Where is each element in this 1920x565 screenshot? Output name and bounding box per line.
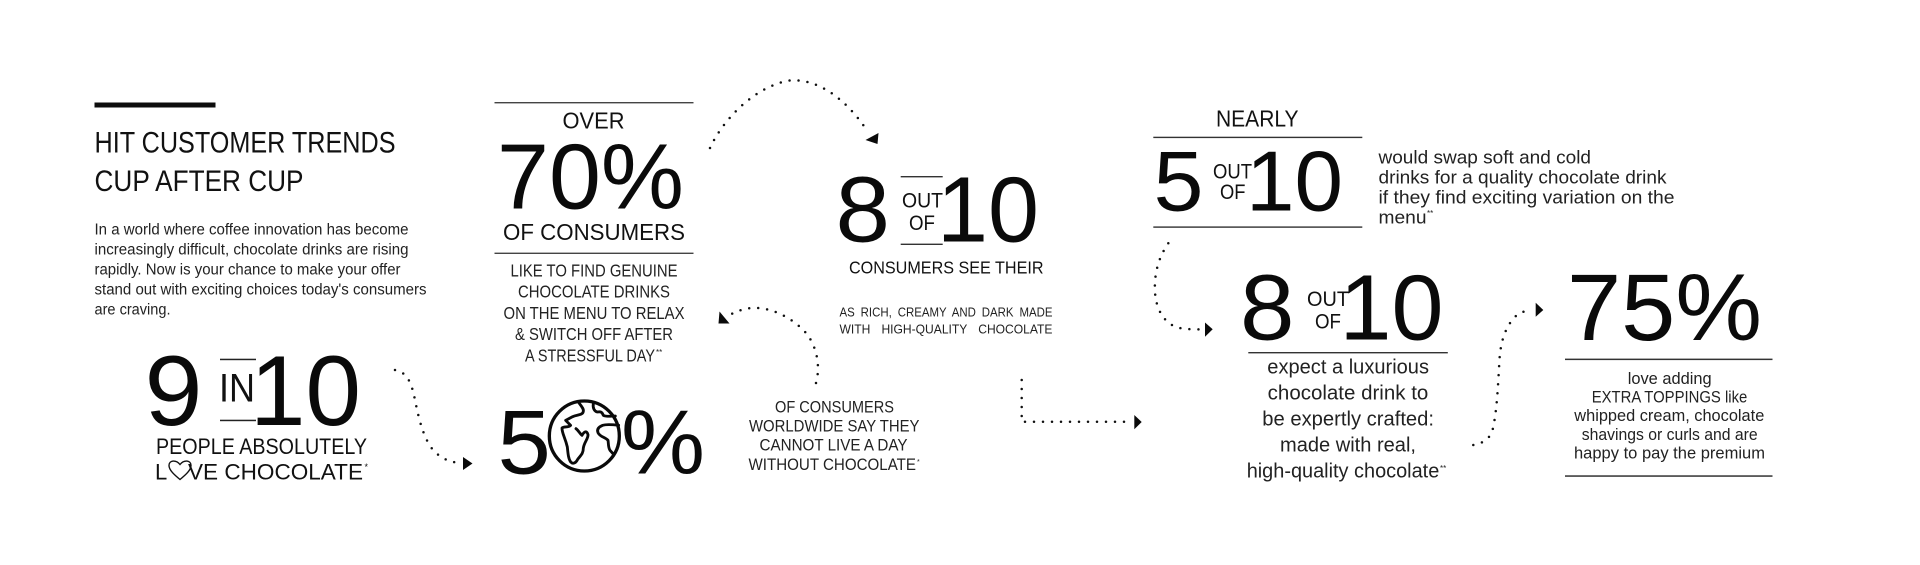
arrow: nearly 5 to 8 out of 10 xyxy=(1155,243,1213,337)
caption: like to find genuine: & SWITCH OFF AFTER xyxy=(515,324,673,344)
caption: love adding: happy to pay the premium xyxy=(1574,443,1765,462)
stat: 5 out of 10: OF xyxy=(1220,181,1246,204)
stat: 8 out of 10: OF xyxy=(1315,310,1341,333)
title bar xyxy=(94,102,216,108)
panel: 50% worldwide xyxy=(498,392,920,493)
caption: would swap: menu xyxy=(1378,207,1426,227)
intro text: increasingly difficult, chocolate drinks are rising xyxy=(94,242,408,258)
stat: 50%: 5 xyxy=(498,392,551,493)
caption: expect a luxurious xyxy=(1247,356,1446,483)
caption: love chocolate: * xyxy=(364,462,368,472)
stat: 5 out of 10 xyxy=(1154,135,1343,230)
caption: rich creamy and dark xyxy=(840,306,1052,336)
caption: like to find genuine: LIKE TO FIND GENUINE xyxy=(510,261,678,281)
caption: expect a luxurious: expect a luxurious xyxy=(1267,356,1429,378)
arrow: 8 out of 10 to nearly 5 xyxy=(1022,380,1142,429)
caption: love adding: EXTRA TOPPINGS like xyxy=(1592,387,1747,406)
caption: like to find genuine xyxy=(504,261,685,365)
panel: 8 out of 10 consumers xyxy=(836,158,1052,336)
stat: 9 in 10: 9 xyxy=(144,335,202,446)
title: HIT CUSTOMER TRENDS xyxy=(94,126,396,160)
stat: 8 out of 10: OUT xyxy=(902,190,943,213)
title: CUP AFTER CUP xyxy=(94,165,304,198)
caption: expect a luxurious: chocolate drink to xyxy=(1268,382,1428,404)
stat: 9 in 10: 10 xyxy=(250,335,361,446)
caption: cannot live a day: CANNOT LIVE A DAY xyxy=(760,436,908,455)
arrow: 9 in 10 to 50% xyxy=(395,370,472,470)
stat: 5 out of 10: 10 xyxy=(1246,135,1343,230)
stat: 8 out of 10: OUT xyxy=(1307,288,1349,311)
stat: 8 out of 10: OF xyxy=(909,212,935,235)
caption: like to find genuine: A STRESSFUL DAY xyxy=(525,345,655,365)
stat: 8 out of 10: 8 xyxy=(1240,255,1294,359)
caption: expect a luxurious: high-quality chocolate xyxy=(1247,461,1439,483)
caption: would swap: drinks for a quality chocolate drink xyxy=(1378,167,1668,187)
intro text xyxy=(94,222,427,318)
panel: nearly 5 out of 10 xyxy=(1153,106,1674,230)
arrow: 8 out of 10 to 75% xyxy=(1473,303,1543,445)
caption: would swap: would swap soft and cold xyxy=(1377,147,1591,167)
caption: would swap: ** xyxy=(1427,209,1433,218)
caption: cannot live a day: WORLDWIDE SAY THEY xyxy=(749,417,920,436)
caption: would swap xyxy=(1377,147,1674,227)
caption: love chocolate: L xyxy=(155,459,167,484)
caption: cannot live a day xyxy=(748,398,920,474)
stat: 75%: 75% xyxy=(1567,255,1762,361)
panel: intro xyxy=(94,102,427,318)
icon: globe xyxy=(549,401,619,471)
caption: expect a luxurious: made with real, xyxy=(1280,435,1416,457)
stat: 9 in 10: IN xyxy=(219,367,255,411)
panel: 75% xyxy=(1565,255,1772,477)
title xyxy=(94,126,396,198)
stat: 50%: % xyxy=(621,392,705,493)
panel: 9 in 10 xyxy=(144,335,368,484)
intro text: stand out with exciting choices today's consumers xyxy=(94,282,427,298)
stat: 5 out of 10: OUT xyxy=(1213,160,1252,183)
caption: love chocolate xyxy=(155,434,368,484)
intro text: In a world where coffee innovation has become xyxy=(94,222,408,238)
caption: love chocolate: PEOPLE ABSOLUTELY xyxy=(156,434,367,459)
caption: like to find genuine: ON THE MENU TO RELAX xyxy=(504,303,685,323)
arrow: 50% back to 70% xyxy=(718,308,818,383)
caption: love adding: whipped cream, chocolate xyxy=(1573,406,1764,425)
caption: love adding xyxy=(1573,369,1765,462)
caption: expect a luxurious: ** xyxy=(1440,464,1446,473)
panel: 8 out of 10 luxurious xyxy=(1240,255,1448,483)
caption: love adding: love adding xyxy=(1628,369,1712,388)
stat: 70%: 70% xyxy=(497,124,684,228)
caption: expect a luxurious: be expertly crafted: xyxy=(1262,408,1434,430)
stat: 9 in 10 xyxy=(144,335,361,446)
caption: rich creamy and dark: WITH HIGH-QUALITY CHOCOLATE xyxy=(840,322,1052,336)
caption: love chocolate: VE CHOCOLATE xyxy=(188,459,363,484)
stat: 8 out of 10: 10 xyxy=(1340,255,1444,359)
stat: 8 out of 10: 8 xyxy=(836,158,890,262)
caption: cannot live a day: OF CONSUMERS xyxy=(775,398,894,417)
panel: over 70% xyxy=(494,102,694,365)
caption: like to find genuine: CHOCOLATE DRINKS xyxy=(518,282,670,302)
stat: 5 out of 10: 5 xyxy=(1154,135,1204,230)
caption: consumers see their: CONSUMERS SEE THEIR xyxy=(849,257,1044,277)
intro text: are craving. xyxy=(94,302,170,318)
label: nearly: NEARLY xyxy=(1216,106,1298,132)
caption: like to find genuine: ** xyxy=(656,348,662,357)
caption: would swap: if they find exciting variation on the xyxy=(1378,187,1674,207)
caption: love adding: shavings or curls and are xyxy=(1582,425,1758,444)
stat: 8 out of 10: 10 xyxy=(937,158,1039,262)
caption: rich creamy and dark: AS RICH, CREAMY AND DARK MADE xyxy=(840,306,1052,320)
stat: 8 out of 10 xyxy=(1240,255,1444,359)
caption: cannot live a day: WITHOUT CHOCOLATE xyxy=(748,455,916,474)
stat: 50% xyxy=(498,392,705,493)
arrow: 70% to 8 out of 10 xyxy=(710,80,878,148)
label: over: OVER xyxy=(562,107,624,133)
stat: 8 out of 10 xyxy=(836,158,1039,262)
label: of consumers: OF CONSUMERS xyxy=(503,219,685,245)
caption: cannot live a day: * xyxy=(917,459,920,466)
intro text: rapidly. Now is your chance to make your offer xyxy=(94,262,400,278)
